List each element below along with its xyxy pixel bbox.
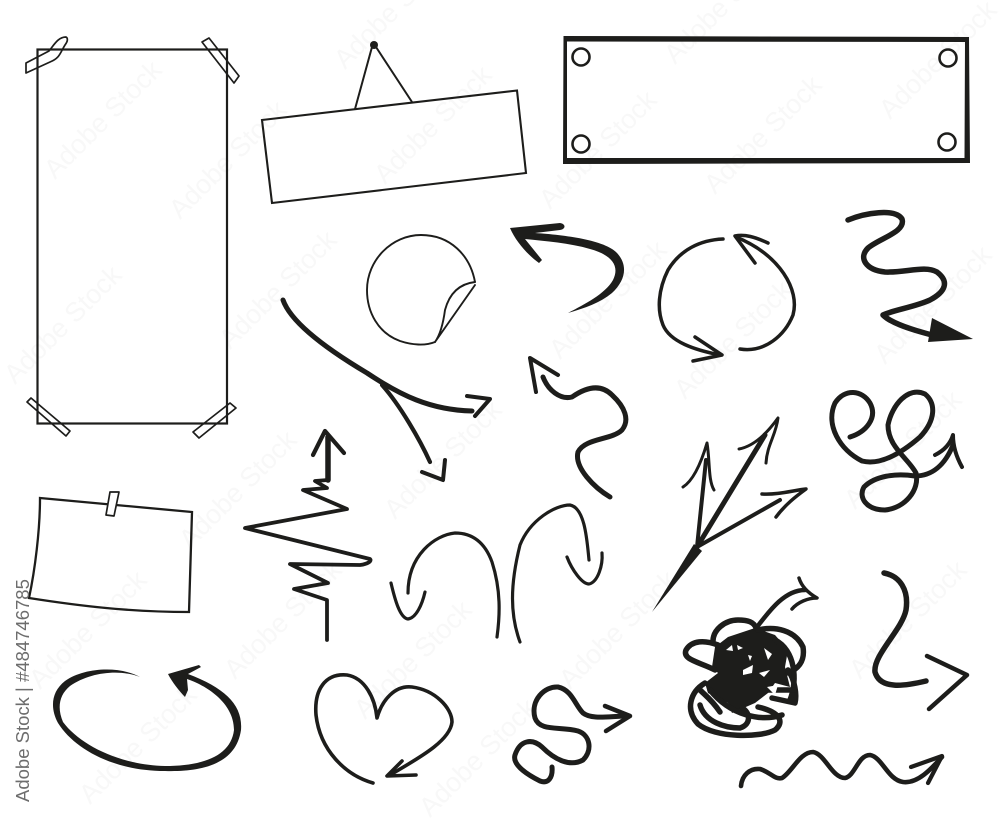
watermark pattern: Adobe Stock [838, 384, 968, 514]
watermark pattern: Adobe Stock [698, 69, 828, 199]
watermark pattern: Adobe Stock [533, 84, 663, 214]
arrow: bold curved left arrow [510, 223, 624, 313]
text: stock credit: Adobe Stock | #484746785 [12, 579, 33, 802]
arrow: circular cycle [659, 235, 794, 361]
panel: tall taped frame [26, 37, 239, 438]
arrow: arch left [391, 533, 499, 637]
watermark pattern: Adobe Stock [668, 274, 798, 404]
panel: hanging sign [262, 41, 526, 203]
watermark pattern: Adobe Stock [348, 594, 478, 724]
watermark pattern: Adobe Stock [553, 564, 683, 694]
arrow: squiggle with solid head [848, 213, 973, 342]
watermark pattern: Adobe Stock [543, 234, 673, 364]
arrow: arch right [512, 505, 602, 642]
arrow: S wave right [515, 687, 630, 782]
arrow: wave bottom [741, 752, 942, 786]
watermark pattern: Adobe Stock [868, 239, 998, 369]
watermark pattern: Adobe Stock [173, 424, 303, 554]
arrow: zigzag upward [245, 431, 371, 640]
arrow: wavy up-left [530, 358, 626, 497]
watermark pattern: Adobe Stock [368, 59, 498, 189]
arrow: heart shape [316, 675, 452, 783]
watermark pattern: Adobe Stock [843, 554, 973, 684]
watermark pattern: Adobe Stock [163, 94, 293, 224]
watermark pattern: Adobe Stock [73, 679, 203, 809]
arrow: oval loop [53, 665, 241, 771]
watermark pattern: Adobe Stock [218, 554, 348, 684]
arrow: forked two-way [283, 300, 490, 480]
arrow: scribble ball [685, 578, 817, 735]
watermark pattern: Adobe Stock [213, 224, 343, 354]
panel: screw plate [563, 36, 970, 164]
arrow: curly loops [832, 392, 962, 510]
watermark pattern: Adobe Stock [23, 564, 153, 694]
arrow: triple branching [652, 418, 806, 612]
watermark pattern: Adobe Stock [0, 259, 128, 389]
arrow: S curve with chevron [875, 573, 967, 709]
icon: peeling sticker [367, 235, 475, 345]
watermark pattern: Adobe Stock [378, 394, 508, 524]
watermark pattern: Adobe Stock [38, 54, 168, 184]
panel: taped note [29, 492, 192, 612]
